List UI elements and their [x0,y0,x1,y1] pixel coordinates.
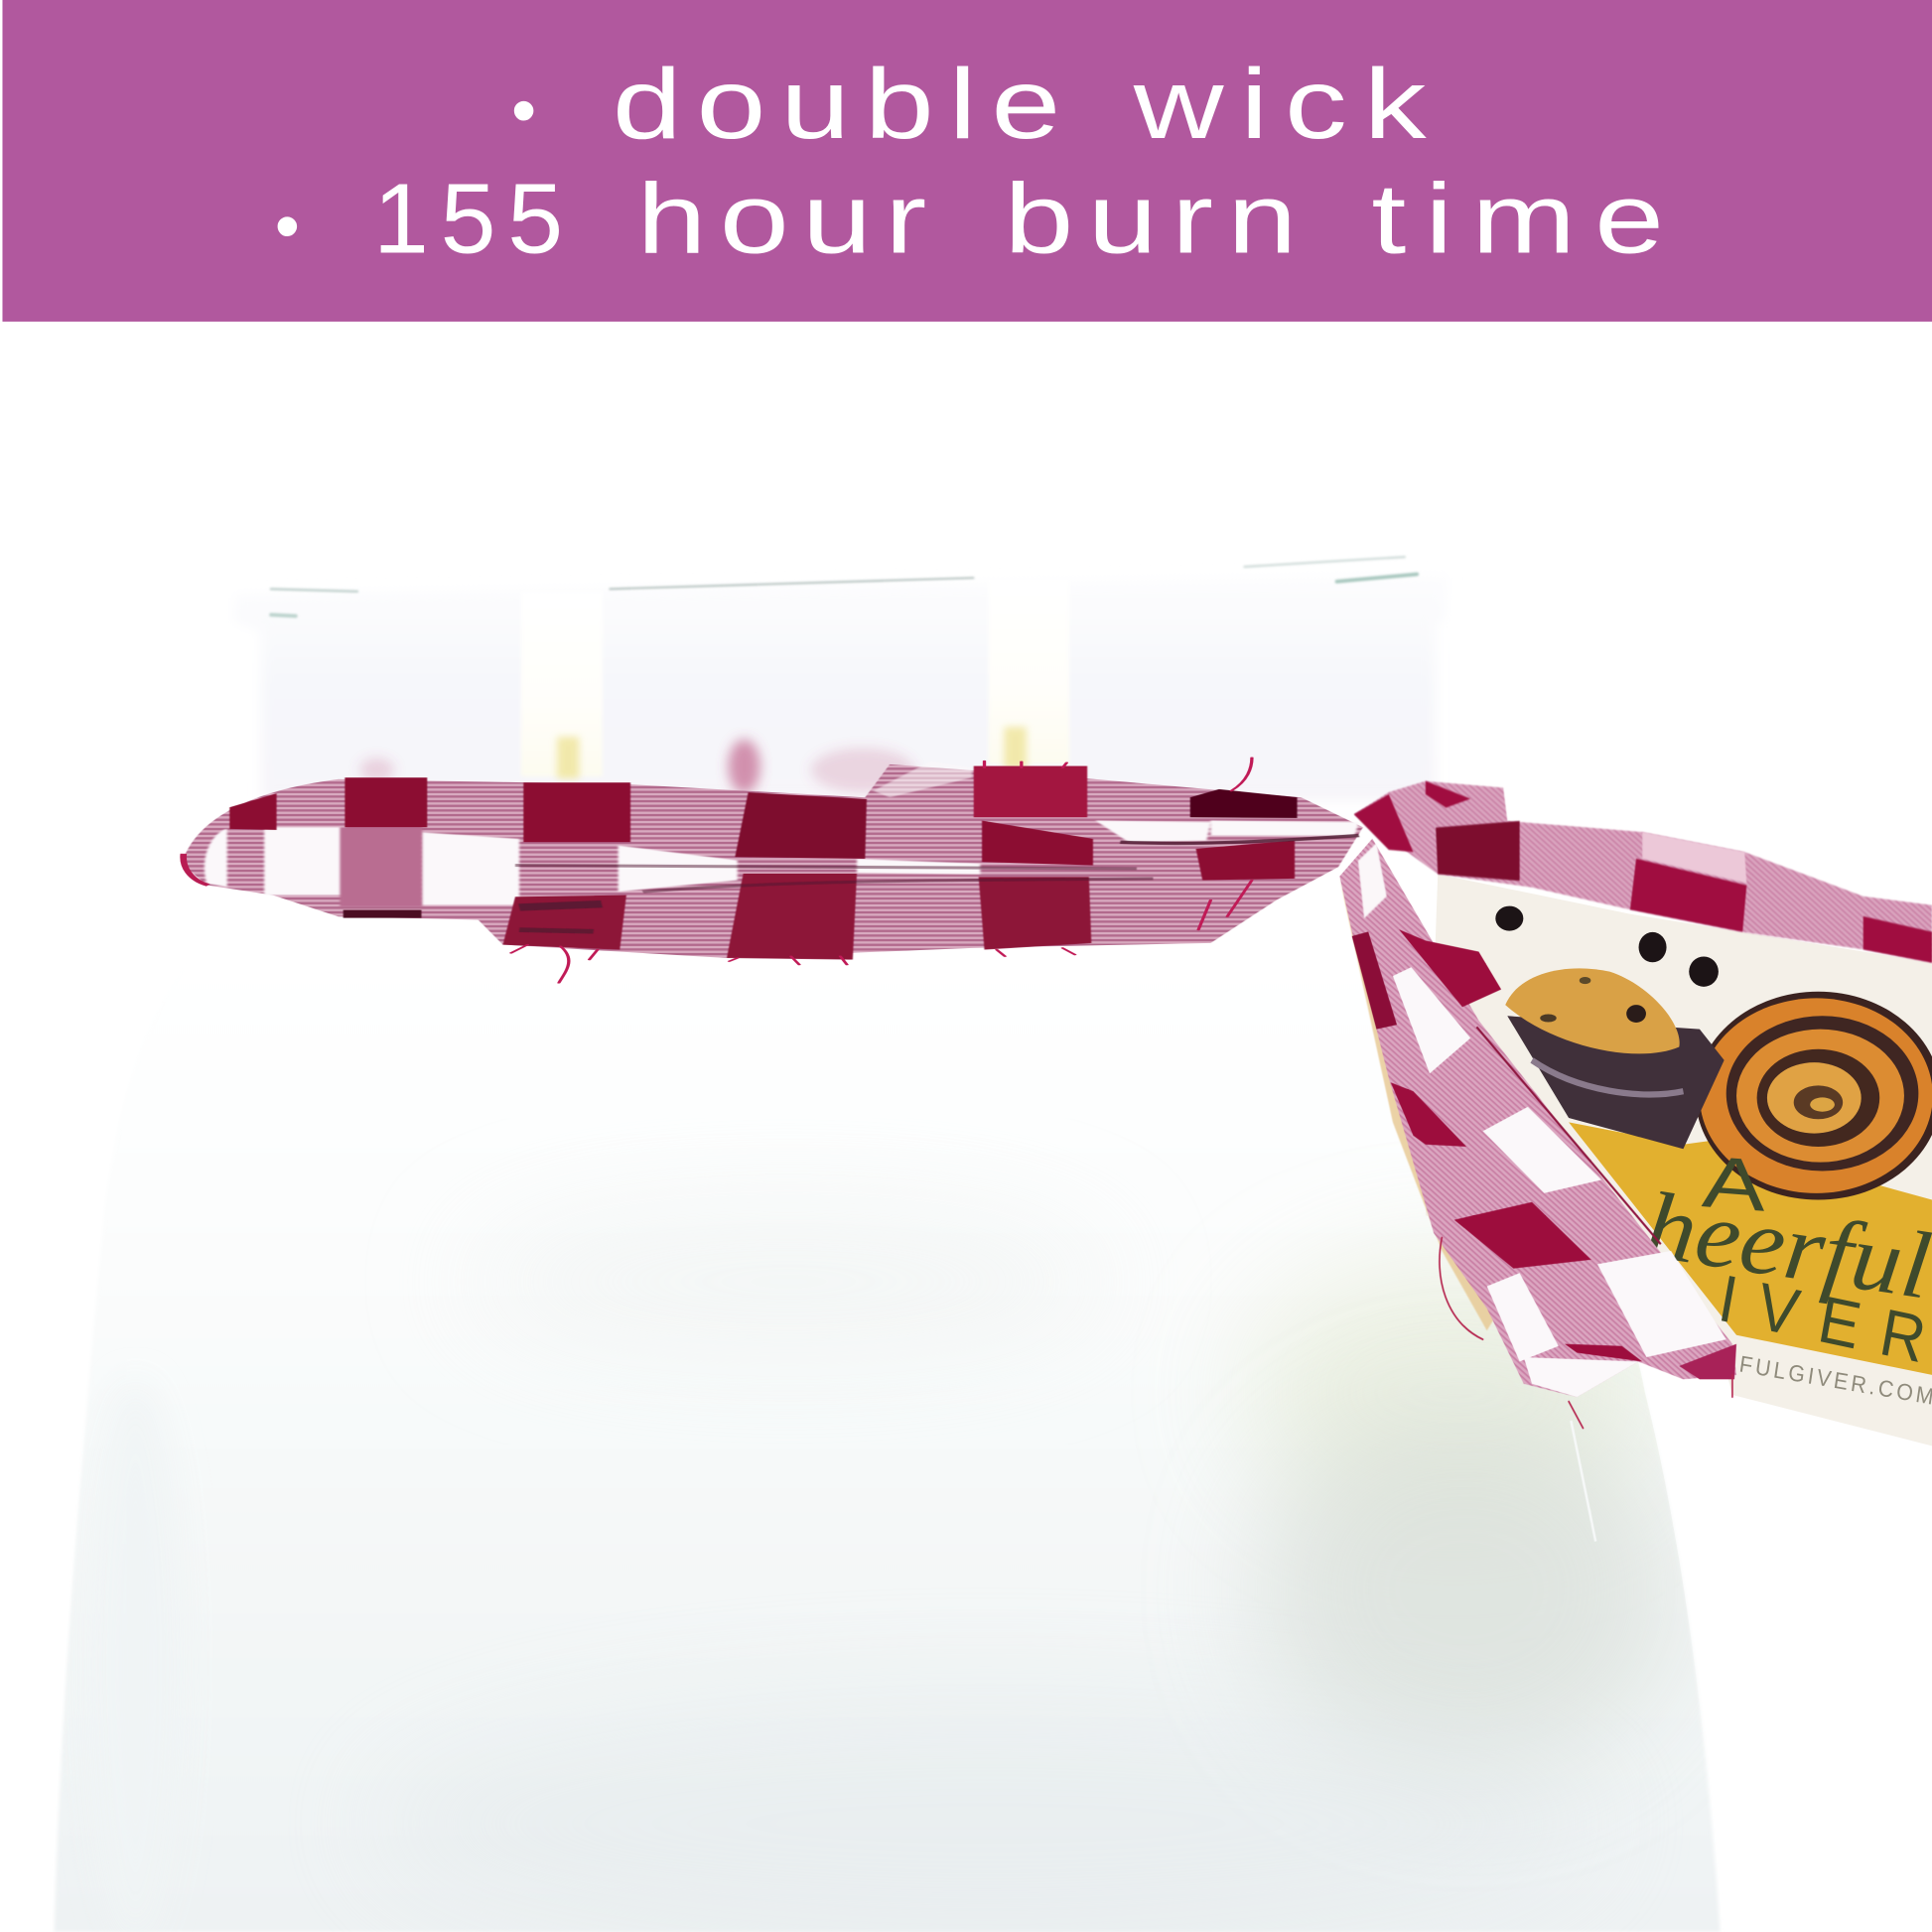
wick glow left [521,592,603,776]
ribbon reflections [359,740,914,793]
wick right [1004,727,1027,768]
glass rim [271,557,1417,617]
tail white stripe [1358,843,1387,918]
candle jar [55,557,1721,1932]
upper strap [1354,781,1932,963]
muffin [1505,968,1725,1149]
tag side edge [1339,879,1503,1330]
line 1: double wick: double [613,49,1060,160]
line 1: double wick: • [511,70,536,150]
fold shadows [515,836,1359,931]
gift tag [1339,874,1932,1446]
letter A: A [1700,1142,1769,1227]
dark crimson checks [229,766,1298,881]
long white thread [1571,1421,1595,1542]
left fold edge [184,854,208,886]
line 2: 155 hour burn time: time [1371,163,1664,275]
tail dark checks [1352,929,1736,1379]
word cheerful: heerful [1640,1172,1932,1318]
upper strap pale edge [1642,832,1746,883]
white checks [205,761,1359,905]
line 2: 155 hour burn time: burn [1004,163,1297,275]
wick glow right [988,579,1069,763]
line 2: 155 hour burn time: hour [637,163,926,275]
jar body [54,1223,1720,1932]
line 2: 155 hour burn time: • [275,187,300,266]
word giver: IVER [1714,1261,1931,1377]
gingham ribbon [182,758,1932,1542]
tail fold line [1476,1027,1661,1244]
tag wordmark [1640,1142,1932,1410]
line 2: 155 hour burn time: 155 [373,163,563,274]
loose threads [1440,1237,1732,1428]
upper strap dark checks [1354,781,1932,963]
mid-pink column [340,827,422,906]
tail white checks [1393,967,1726,1397]
wick left [557,737,579,778]
yellow label [1569,1122,1932,1375]
line 1: double wick: wick [1133,49,1428,160]
ribbon tail and bow [1339,781,1932,1428]
fringe threads [511,758,1252,983]
jar neck [234,574,1449,801]
polka dots [1495,906,1719,987]
hanging tail [1339,839,1736,1397]
ribbon band around neck [182,758,1363,983]
cinnamon roll [1696,992,1932,1200]
line 1: double wick [511,49,1428,160]
tag url: FULGIVER.COM [1737,1351,1932,1410]
tag card [1426,874,1932,1446]
lower fringe checks [344,874,1091,960]
line 2: 155 hour burn time [275,163,1664,275]
header banner [2,0,1932,322]
